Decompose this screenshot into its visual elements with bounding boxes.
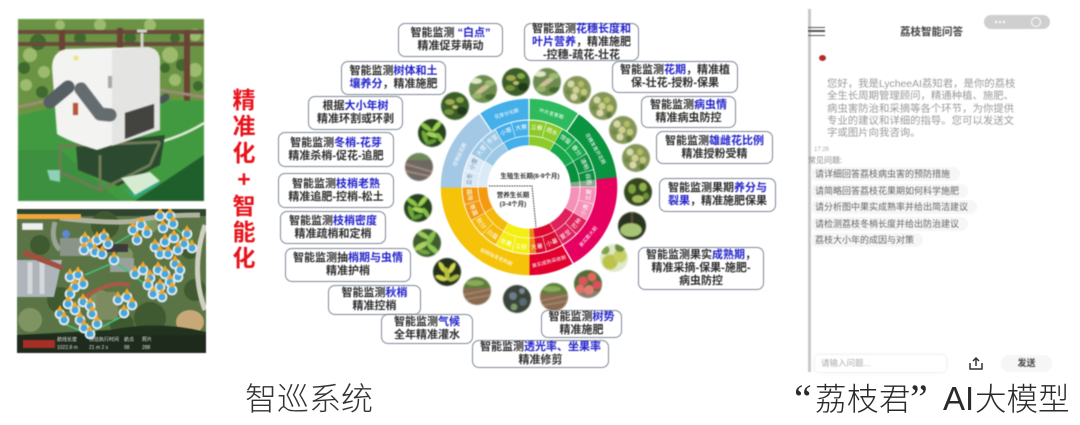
common questions label: 常见问题: bbox=[808, 156, 842, 165]
callout: shooting period and pests: 智能监测抽梢期与虫情 bbox=[293, 252, 403, 264]
wheel: solar term labels: 立冬 bbox=[465, 173, 474, 186]
wheel: inner ring segments bbox=[455, 113, 603, 261]
welcome message: 字或图片向我咨询。 bbox=[827, 128, 921, 139]
callout: tree vigor: 智能监测树势 bbox=[548, 311, 614, 323]
wheel: dashed stage divider bbox=[489, 186, 536, 227]
wheel: outer ring stage labels: 果实膨大期 bbox=[578, 225, 599, 249]
wheel: solar term labels: 夏至 bbox=[559, 229, 573, 241]
photo ring: growth stage photos bbox=[403, 67, 653, 314]
wheel: reproductive stage label: 生殖生长期(8-9个月) bbox=[500, 171, 560, 180]
callout: shoot density: 智能监测枝梢密度 bbox=[289, 214, 377, 226]
send button bbox=[1001, 355, 1052, 372]
callout: biennial bearing: 精准环割或环剥 bbox=[317, 113, 394, 125]
timestamp: 17:26 bbox=[814, 147, 829, 153]
icon: menu bbox=[808, 27, 825, 36]
mini-program capsule bbox=[984, 15, 1050, 29]
phone left edge bbox=[808, 9, 810, 372]
question chip 5 bbox=[811, 233, 923, 247]
wheel: outer ring stage labels: 枝梢抽发老熟期 bbox=[479, 247, 514, 268]
wheel: solar term labels: 芒种 bbox=[570, 216, 583, 231]
question chip 4 bbox=[811, 217, 968, 231]
callout: shoot maturity: 智能监测枝梢老熟 bbox=[292, 178, 380, 190]
callout: shoot maturity: 精准追肥-控梢-松土 bbox=[288, 190, 384, 202]
question chip 2: 请简略回答荔枝花果期如何科学施肥 bbox=[815, 186, 959, 196]
callout: tree vigor bbox=[541, 310, 622, 338]
callout: tree and soil nutrients bbox=[341, 61, 446, 95]
chat input box: 请输入问题... bbox=[821, 358, 871, 368]
wheel: solar term labels: 秋分 bbox=[475, 216, 488, 231]
wheel: outer ring stage labels: 花穗发育开花期 bbox=[583, 132, 607, 166]
photo: aerial patrol route map: 预估执行时间 bbox=[89, 336, 119, 343]
wheel: solar term labels: 大暑 bbox=[530, 242, 543, 251]
wheel: outer ring stage labels: 果实成熟采收期 bbox=[531, 254, 567, 270]
wheel: solar term labels: 立春 bbox=[530, 123, 543, 132]
wheel: outer ring stage labels: 花芽分化期 bbox=[494, 107, 520, 121]
icon: upload bbox=[969, 357, 983, 370]
callout: shooting period and pests bbox=[285, 248, 411, 282]
callout: light transmission and fruit set: 智能监测透光率、坐果率 bbox=[480, 341, 601, 353]
photo: aerial patrol route map: 288 bbox=[142, 345, 151, 351]
wheel: solar term labels: 小寒 bbox=[499, 126, 513, 138]
chat input box bbox=[815, 355, 946, 372]
callout: biennial bearing bbox=[308, 96, 403, 130]
caption: lychee AI model: 大模型 bbox=[975, 381, 1070, 417]
heading: precision and intelligence: 智 bbox=[232, 193, 256, 219]
callout: flowering period: 保-壮花-授粉-保果 bbox=[631, 77, 719, 89]
callout: winter shoots: 精准杀梢-促花-追肥 bbox=[288, 150, 384, 162]
question chip 3: 请分析图中果实成熟率并给出简洁建议 bbox=[815, 202, 968, 212]
callout: fruit ripening: 精准采摘-保果-施肥- bbox=[652, 262, 750, 274]
callout: shoot density: 精准疏梢和定梢 bbox=[294, 228, 372, 240]
wheel: solar term labels: 小暑 bbox=[545, 236, 559, 248]
callout: light transmission and fruit set: 精准修剪 bbox=[518, 354, 562, 366]
icon: lychee avatar bbox=[819, 55, 826, 61]
callout: flowering period: 智能监测花期，精准植 bbox=[620, 64, 730, 76]
photo: aerial patrol route map: 照片 bbox=[142, 336, 152, 343]
wheel: outer ring stage labels bbox=[451, 107, 607, 270]
callout: tree vigor: 精准施肥 bbox=[560, 324, 604, 336]
callout: panicle length and leaf nutrition bbox=[524, 23, 639, 61]
photo: aerial patrol route map: 航线长度 bbox=[57, 336, 77, 343]
photo: aerial patrol route map: 1022.8 m bbox=[57, 345, 78, 351]
chart: lychee growth cycle wheel with photos bbox=[402, 66, 654, 314]
callout: shoot density bbox=[280, 211, 386, 244]
heading: precision and intelligence: + bbox=[237, 166, 251, 192]
question chip 1: 请详细回答荔枝病虫害的预防措施 bbox=[815, 169, 950, 179]
callout: male female flower ratio: 智能监测雄雌花比例 bbox=[665, 134, 764, 146]
wheel: white centre bbox=[488, 146, 570, 228]
callout: biennial bearing: 根据大小年树 bbox=[322, 100, 388, 112]
welcome message bbox=[827, 78, 1016, 139]
callout: winter shoots: 智能监测冬梢-花芽 bbox=[290, 136, 382, 148]
callout: male female flower ratio: 精准授粉受精 bbox=[682, 148, 748, 160]
wheel: vegetative stage label: (3-4个月) bbox=[500, 200, 526, 208]
callout: fruit ripening bbox=[638, 247, 764, 290]
wheel: solar term labels: 冬至 bbox=[485, 133, 500, 146]
caption: patrol system: 智巡系统 bbox=[245, 381, 373, 417]
callout: tree and soil nutrients: 智能监测树体和土 bbox=[350, 65, 438, 77]
callout: shooting period and pests: 精准护梢 bbox=[326, 265, 370, 277]
callout: white point: 智能监测 “白点” bbox=[410, 27, 491, 39]
heading: precision and intelligence: 准 bbox=[232, 113, 256, 139]
wheel: solar term labels: 白露 bbox=[485, 228, 500, 241]
callout: fruit nutrition and cracking bbox=[659, 178, 776, 212]
wheel: solar term labels: 清明 bbox=[578, 157, 590, 171]
callout: fruit nutrition and cracking: 智能监测果期养分与 bbox=[668, 182, 767, 194]
wheel: solar term labels: 霜降 bbox=[465, 188, 474, 201]
callout: autumn shoots: 精准控梢 bbox=[352, 300, 396, 312]
callout: white point: 精准促芽萌动 bbox=[418, 40, 484, 52]
wheel: outer ring stage labels: 控梢促花期 bbox=[451, 142, 468, 167]
chat title: 荔枝智能问答 bbox=[900, 26, 963, 38]
callout: panicle length and leaf nutrition: 叶片营养，精准施肥 bbox=[532, 36, 631, 48]
caption: lychee AI model: ” bbox=[910, 376, 928, 421]
wheel: solar term labels: 春分 bbox=[570, 143, 583, 158]
callout: light transmission and fruit set bbox=[472, 340, 609, 368]
photo: irrigation robot on grass bbox=[17, 18, 205, 202]
photo: aerial patrol route map bbox=[16, 208, 207, 354]
caption: lychee AI model bbox=[794, 376, 1070, 421]
callout: male female flower ratio bbox=[656, 131, 773, 164]
heading: precision and intelligence: 化 bbox=[232, 245, 256, 271]
question chip 1 bbox=[811, 167, 960, 181]
question chip 5: 荔枝大小年的成因与对策 bbox=[815, 235, 914, 245]
wheel: solar term labels: 寒露 bbox=[468, 203, 480, 217]
callout: autumn shoots: 智能监测秋梢 bbox=[342, 287, 408, 299]
panel: chat phone screenshot bbox=[807, 8, 1050, 372]
heading: precision and intelligence: 精 bbox=[232, 87, 256, 113]
callout: panicle length and leaf nutrition: -控穗-疏花-壮花 bbox=[543, 48, 620, 60]
callout: climate bbox=[381, 314, 473, 344]
callout: shoot maturity bbox=[278, 173, 394, 208]
caption: lychee AI model: 荔枝君 bbox=[815, 381, 911, 417]
wheel: outer ring segments bbox=[421, 79, 637, 295]
callout: fruit ripening: 智能监测果实成熟期， bbox=[646, 249, 756, 261]
photo: aerial patrol route map: 21 m 2 s bbox=[89, 345, 109, 351]
wheel: solar term labels: 小雪 bbox=[468, 157, 480, 171]
wheel: solar term labels: 小满 bbox=[578, 203, 590, 217]
callout: pests and diseases bbox=[641, 96, 736, 128]
question chip 2 bbox=[811, 184, 968, 198]
callout: panicle length and leaf nutrition: 智能监测花穗长度和 bbox=[532, 22, 631, 34]
photo: aerial patrol route map: 98 bbox=[124, 345, 130, 351]
wheel: solar term labels: 雨水 bbox=[545, 126, 559, 138]
wheel: solar term labels: 大寒 bbox=[515, 123, 528, 132]
question chip 4: 请检测荔枝冬梢长度并给出防治建议 bbox=[815, 219, 959, 229]
send button: 发送 bbox=[1017, 358, 1036, 368]
photo: aerial patrol route map: 航点 bbox=[124, 336, 134, 343]
welcome message: 专业的建议和详细的指导。您可以发送文 bbox=[827, 116, 1014, 127]
caption: lychee AI model: “ bbox=[794, 376, 812, 421]
callout: fruit nutrition and cracking: 裂果，精准施肥保果 bbox=[668, 195, 767, 207]
wheel: solar term labels: 处暑 bbox=[499, 236, 513, 248]
callout: white point bbox=[398, 23, 503, 57]
heading: precision and intelligence: 能 bbox=[232, 219, 256, 245]
wheel: solar term labels: 立秋 bbox=[515, 242, 528, 251]
callout: climate: 智能监测气候 bbox=[394, 316, 460, 328]
wheel: solar term labels: 谷雨 bbox=[584, 173, 593, 186]
wheel: solar term labels: 立夏 bbox=[584, 188, 593, 201]
heading: precision and intelligence: 化 bbox=[232, 140, 256, 166]
question chip 3 bbox=[811, 200, 977, 214]
callout: fruit ripening: 病虫防控 bbox=[679, 275, 723, 287]
wheel: solar term labels bbox=[465, 123, 593, 251]
callout: pests and diseases: 智能监测病虫情 bbox=[650, 99, 727, 111]
caption: lychee AI model: AI bbox=[943, 380, 974, 417]
wheel: outer ring stage labels: 叶片发育期 bbox=[538, 107, 564, 121]
wheel: vegetative stage label: 营养生长期 bbox=[497, 192, 529, 199]
wheel: solar term labels: 惊蛰 bbox=[558, 133, 573, 146]
callout: autumn shoots bbox=[328, 285, 421, 315]
callout: winter shoots bbox=[278, 132, 394, 167]
callout: pests and diseases: 精准病虫防控 bbox=[656, 112, 722, 124]
welcome message: 全生长周期管理顾问，精通种植、施肥、 bbox=[827, 91, 1014, 102]
callout: flowering period bbox=[612, 61, 738, 93]
heading: precision and intelligence bbox=[232, 87, 256, 271]
wheel: solar term labels: 大雪 bbox=[475, 143, 488, 158]
callout: climate: 全年精准灌水 bbox=[394, 329, 460, 341]
welcome message: 病虫害防治和采摘等各个环节，为你提供 bbox=[827, 104, 1014, 115]
welcome message: 您好，我是LycheeAI荔知君，是你的荔枝 bbox=[827, 79, 1015, 90]
callout: tree and soil nutrients: 壤养分，精准施肥 bbox=[350, 78, 438, 90]
